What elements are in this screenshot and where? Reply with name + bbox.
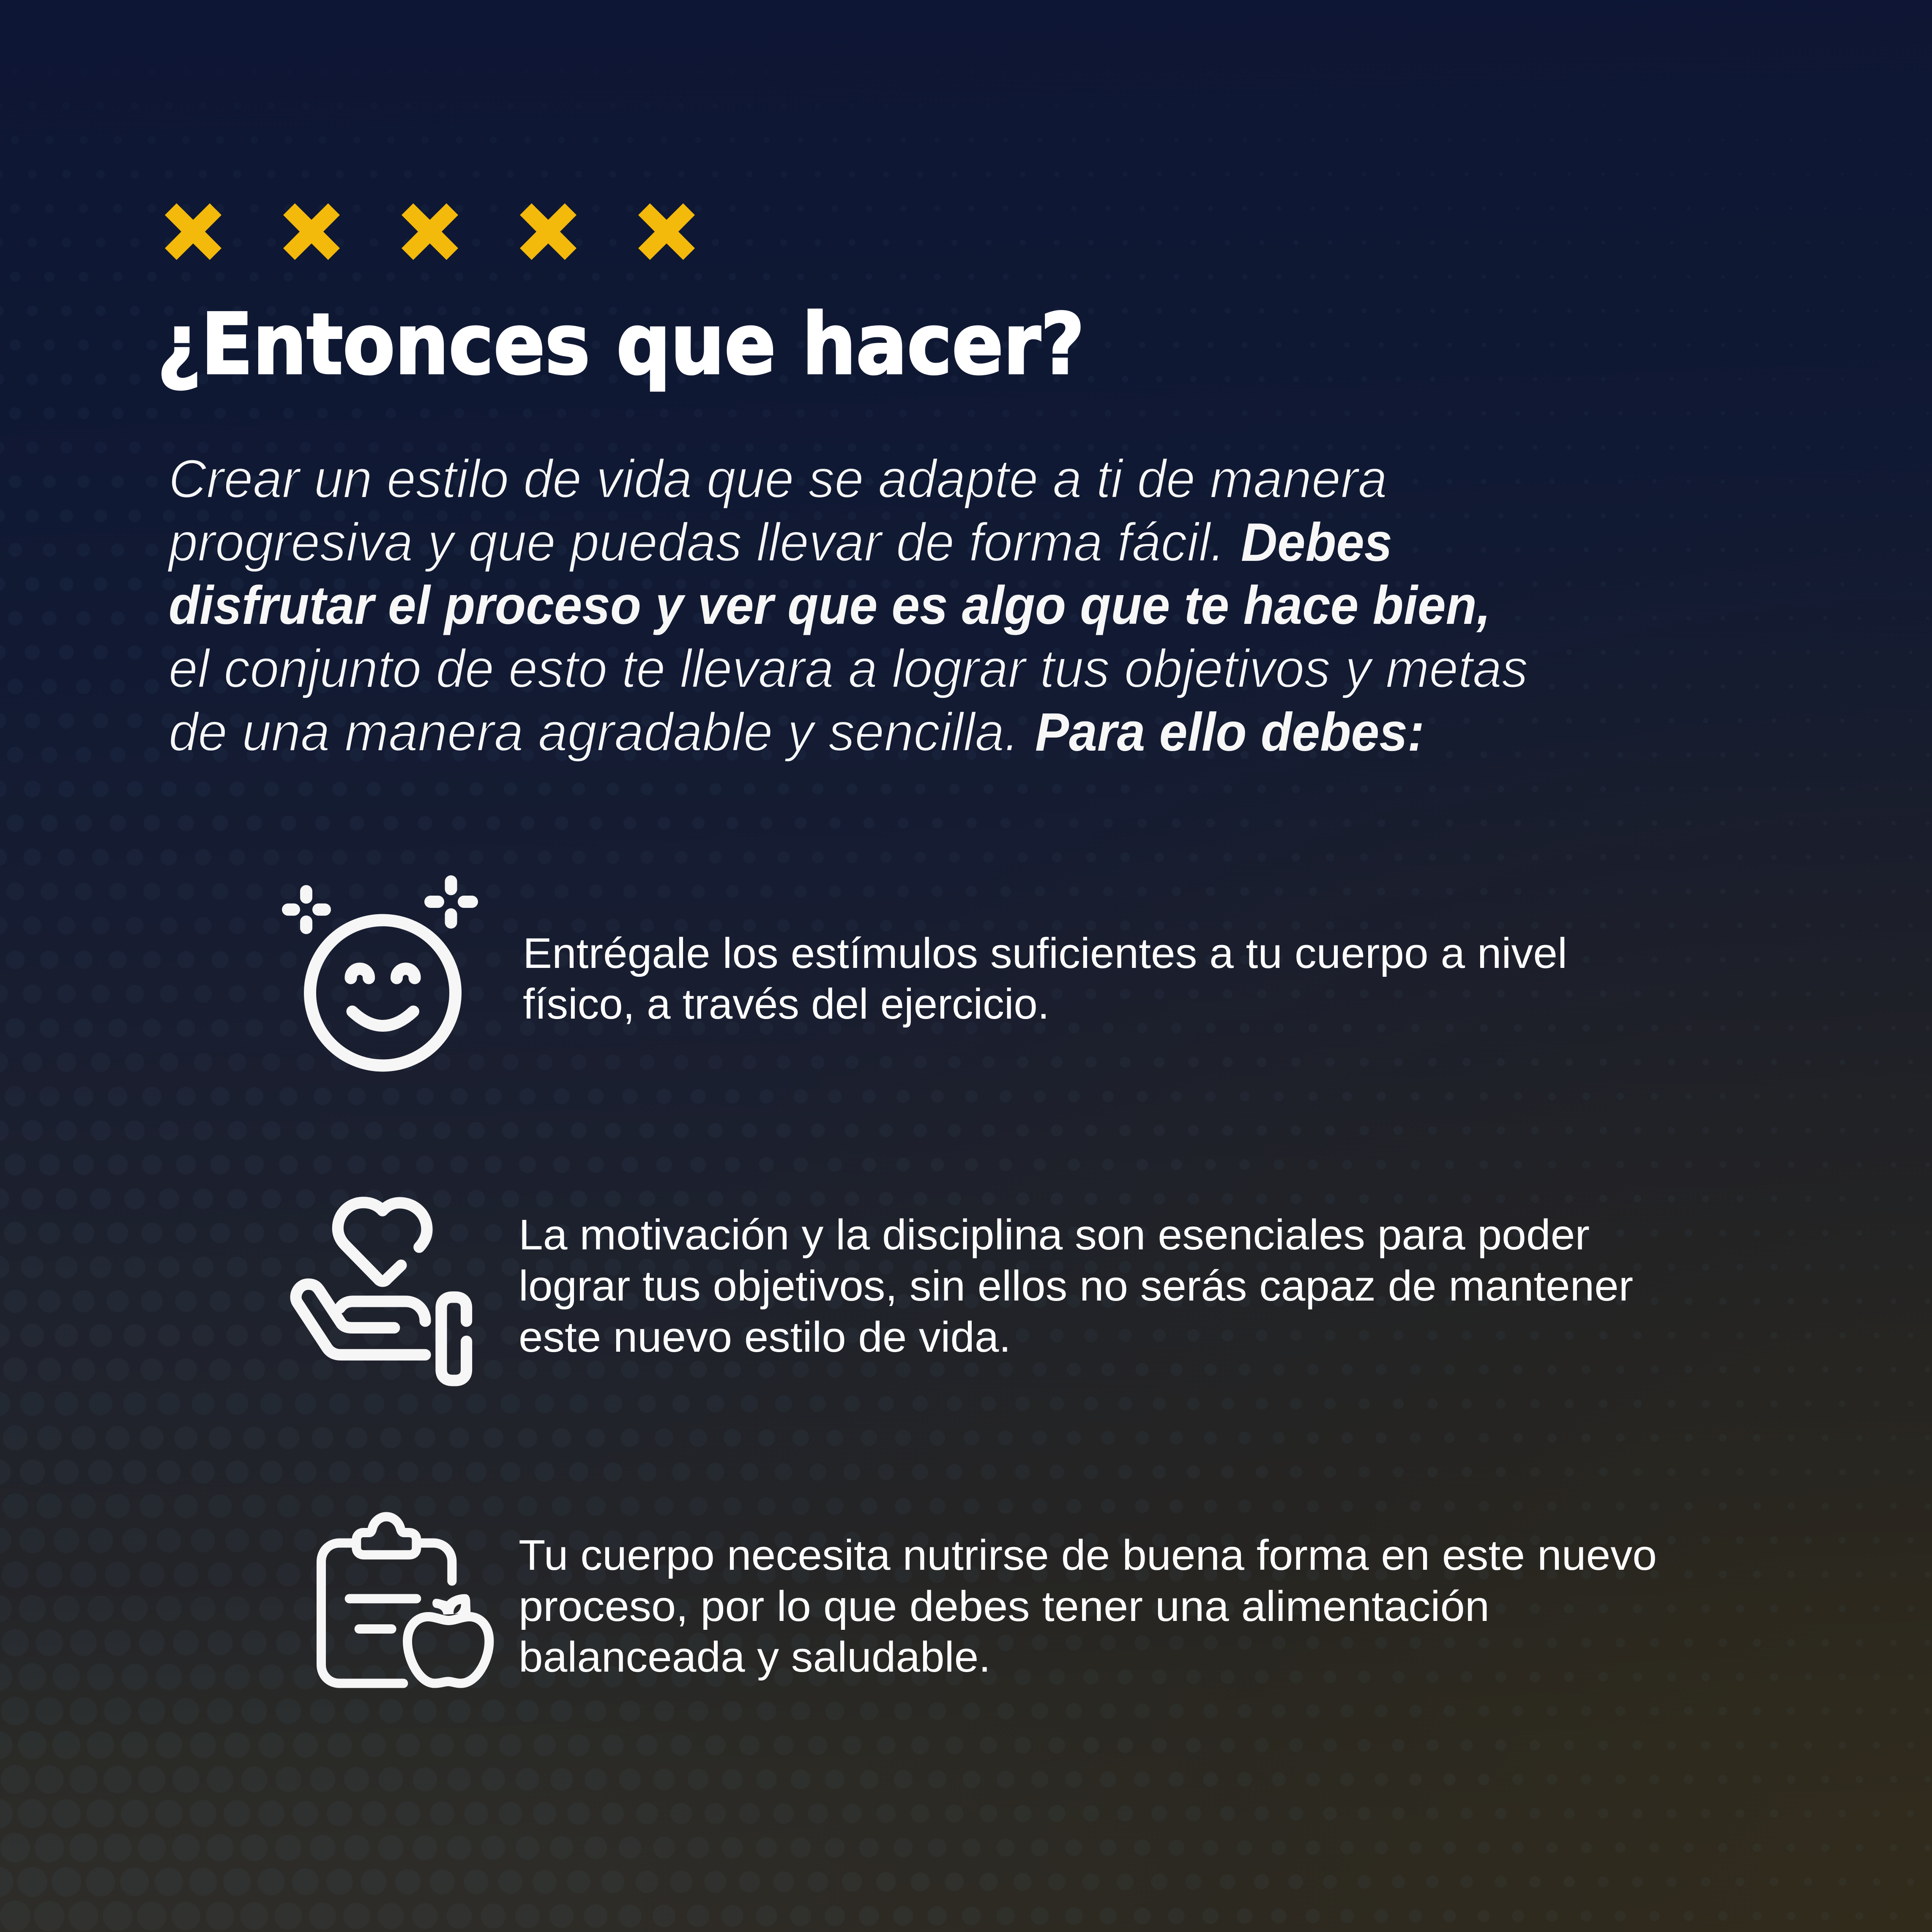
text: motivation and discipline: lograr tus objetivos, sin ellos no serás capaz de mantener <box>519 1262 1633 1310</box>
title: ¿Entonces que hacer? <box>157 295 1085 393</box>
text: motivation and discipline <box>519 1211 1633 1361</box>
cross 4 <box>520 203 577 260</box>
intro paragraph: de una manera agradable y sencilla. <box>169 702 1019 762</box>
intro paragraph: progresiva y que puedas llevar de forma fácil. <box>167 512 1225 573</box>
text: nutrition: proceso, por lo que debes tener una alimentación <box>519 1583 1489 1630</box>
cross 5 <box>638 203 695 260</box>
text: physical stimulus: Entrégale los estímulos suficientes a tu cuerpo a nivel <box>523 930 1567 977</box>
text: nutrition: Tu cuerpo necesita nutrirse de buena forma en este nuevo <box>519 1532 1657 1579</box>
text: motivation and discipline: La motivación y la disciplina son esenciales para poder <box>519 1211 1590 1259</box>
cross 2 <box>283 203 340 260</box>
icon: clipboard with apple <box>321 1517 489 1683</box>
intro paragraph: Para ello debes: <box>1035 702 1424 762</box>
row of five yellow crosses <box>165 203 695 260</box>
intro paragraph: disfrutar el proceso y ver que es algo que te hace bien, <box>169 575 1491 636</box>
icon: smiling face with sparkles <box>288 882 472 1066</box>
cross 3 <box>402 203 458 260</box>
text: nutrition: balanceada y saludable. <box>519 1634 991 1681</box>
cross 1 <box>165 203 221 260</box>
text: nutrition <box>519 1532 1657 1681</box>
intro paragraph: el conjunto de esto te llevara a lograr tus objetivos y metas <box>169 639 1528 699</box>
icon: hand holding a heart <box>296 1202 467 1380</box>
intro paragraph: Debes <box>1241 512 1392 573</box>
intro paragraph <box>167 449 1528 762</box>
text: physical stimulus: físico, a través del ejercicio. <box>523 981 1049 1028</box>
text: physical stimulus <box>523 930 1567 1028</box>
intro paragraph: Crear un estilo de vida que se adapte a ti de manera <box>169 449 1387 509</box>
text: motivation and discipline: este nuevo estilo de vida. <box>519 1314 1011 1361</box>
